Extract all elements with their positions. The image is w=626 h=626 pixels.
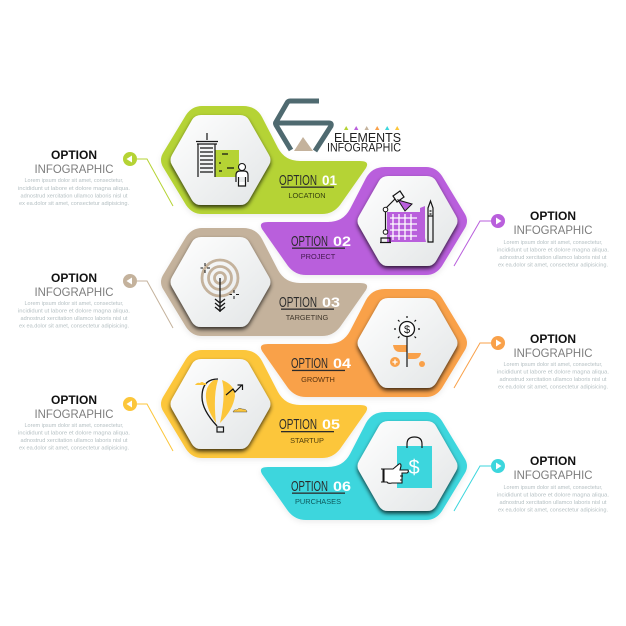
callout: right option 4: OPTION xyxy=(530,334,576,346)
callout: left option 1: Lorem ipsum dolor sit amet, consectetur, xyxy=(24,178,124,184)
label: option 02 xyxy=(291,233,351,261)
callout: left option 1: OPTION xyxy=(51,150,97,162)
callout: right option 6: Lorem ipsum dolor sit amet, consectetur, xyxy=(504,485,602,491)
icon: shopping bag and pointing hand: $ xyxy=(408,457,420,479)
label: option 02: PROJECT xyxy=(301,252,336,261)
label: option 02: 02 xyxy=(333,233,351,249)
callout: right option 2 xyxy=(454,211,609,268)
callout: left option 1: INFOGRAPHIC xyxy=(34,162,114,176)
callout: right option 4: Lorem ipsum dolor sit amet, consectetur, xyxy=(504,362,602,368)
label: option 06: OPTION xyxy=(291,478,328,495)
label: option 03: 03 xyxy=(322,294,340,310)
callout: left option 3: adnostrud xercitation ullamco laboris nisl ut xyxy=(20,316,128,322)
label: option 04 xyxy=(291,355,351,384)
label: option 05: 05 xyxy=(322,416,340,432)
callout: right option 6 xyxy=(454,456,609,514)
icon: hot air balloon xyxy=(195,379,247,432)
panel: option 06 purchases xyxy=(261,412,467,520)
panel: option 02 project xyxy=(261,167,467,275)
callout: right option 6: OPTION xyxy=(530,456,576,468)
callout: right option 6: incididunt ut labore et dolore magna aliqua. xyxy=(497,492,609,498)
icon: building and person xyxy=(196,133,248,186)
callout: left option 5: incididunt ut labore et dolore magna aliqua. xyxy=(18,430,130,436)
label: option 01: 01 xyxy=(322,172,337,188)
label: option 05: STARTUP xyxy=(290,436,324,445)
callout: left option 3: ex ea.dolor sit amet, consectetur adipisicing. xyxy=(19,324,129,330)
callout: left option 3: OPTION xyxy=(51,273,97,285)
callout: left option 1: adnostrud xercitation ullamco laboris nisl ut xyxy=(20,194,128,200)
icon: target with arrow xyxy=(200,260,239,312)
label: option 04: OPTION xyxy=(291,355,328,372)
label: option 04: 04 xyxy=(333,355,351,371)
callout: left option 5: INFOGRAPHIC xyxy=(34,407,114,421)
label: option 03: OPTION xyxy=(279,294,317,311)
callout: right option 6: ex ea.dolor sit amet, consectetur adipisicing. xyxy=(498,508,608,514)
callout: right option 4: ex ea.dolor sit amet, consectetur adipisicing. xyxy=(498,384,608,390)
icon: desk lamp, blueprint and pen xyxy=(380,191,433,242)
label: option 03 xyxy=(279,294,340,322)
callout: right option 6: adnostrud xercitation ullamco laboris nisl ut xyxy=(500,500,607,506)
callout: left option 5: ex ea.dolor sit amet, consectetur adipisicing. xyxy=(19,446,129,452)
callout: left option 1: ex ea.dolor sit amet, consectetur adipisicing. xyxy=(19,201,129,207)
panel: option 05 startup xyxy=(161,350,367,458)
callout: right option 6: INFOGRAPHIC xyxy=(514,468,593,482)
label: option 05: OPTION xyxy=(279,416,317,433)
callout: right option 2: incididunt ut labore et dolore magna aliqua. xyxy=(497,248,609,254)
label: option 03: TARGETING xyxy=(286,313,329,322)
callout: right option 2: OPTION xyxy=(530,211,576,223)
callout: right option 2: ex ea.dolor sit amet, consectetur adipisicing. xyxy=(498,262,608,268)
callout: right option 4: incididunt ut labore et dolore magna aliqua. xyxy=(497,370,609,376)
callout: right option 4: INFOGRAPHIC xyxy=(514,346,593,360)
label: option 05 xyxy=(279,416,340,445)
callout: left option 5: Lorem ipsum dolor sit amet, consectetur, xyxy=(24,423,124,429)
callout: right option 4: adnostrud xercitation ullamco laboris nisl ut xyxy=(500,377,607,383)
callout: left option 3: incididunt ut labore et dolore magna aliqua. xyxy=(18,308,130,314)
logo: elements infographic xyxy=(276,101,401,154)
callout: left option 3: INFOGRAPHIC xyxy=(34,285,114,299)
callout: left option 1: incididunt ut labore et dolore magna aliqua. xyxy=(18,186,130,192)
callout: left option 5: adnostrud xercitation ullamco laboris nisl ut xyxy=(20,438,128,444)
label: option 06: 06 xyxy=(333,478,351,494)
logo: elements infographic: INFOGRAPHIC xyxy=(327,142,401,154)
label: option 06: PURCHASES xyxy=(295,497,341,506)
callout: left option 3: Lorem ipsum dolor sit amet, consectetur, xyxy=(24,301,124,307)
callout: left option 5 xyxy=(18,395,173,452)
label: option 06 xyxy=(291,478,351,506)
label: option 02: OPTION xyxy=(291,233,328,250)
panel: option 04 growth xyxy=(261,289,467,397)
icon: shopping bag and pointing hand xyxy=(381,437,432,488)
callout: left option 1 xyxy=(18,150,173,207)
icon: money plant: $ xyxy=(404,324,410,336)
label: option 01: OPTION xyxy=(279,172,317,189)
callout: left option 5: OPTION xyxy=(51,395,97,407)
callout: right option 4 xyxy=(454,334,609,390)
label: option 01 xyxy=(279,172,337,200)
callout: right option 2: INFOGRAPHIC xyxy=(514,223,593,237)
callout: left option 3 xyxy=(18,273,173,330)
callout: right option 2: Lorem ipsum dolor sit amet, consectetur, xyxy=(504,240,602,246)
icon: money plant xyxy=(390,316,425,367)
callout: right option 2: adnostrud xercitation ullamco laboris nisl ut xyxy=(500,255,607,261)
logo: elements infographic: ELEMENTS xyxy=(334,131,401,145)
label: option 04: GROWTH xyxy=(301,375,335,384)
label: option 01: LOCATION xyxy=(288,191,326,200)
panel: option 03 targeting xyxy=(161,228,367,336)
panel: option 01 location xyxy=(161,106,367,214)
